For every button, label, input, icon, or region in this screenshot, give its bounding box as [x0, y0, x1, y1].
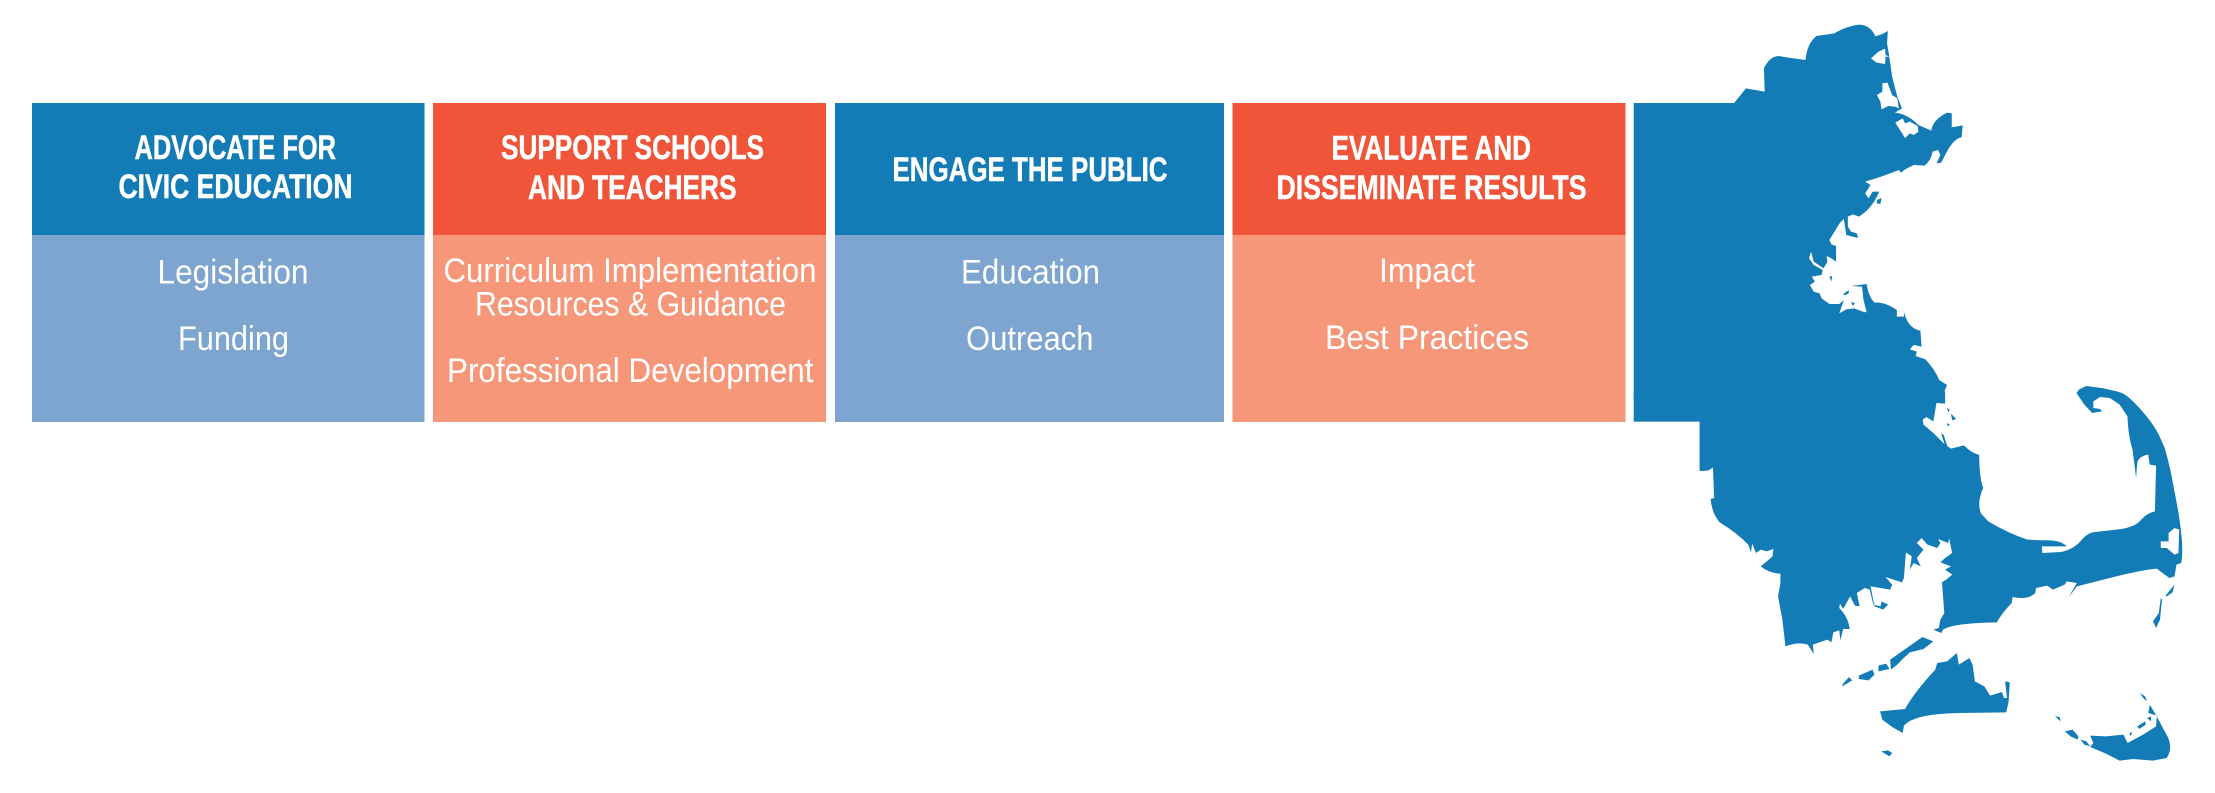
list: education and outreach: [961, 254, 1100, 358]
panel: engage the public: [835, 103, 1224, 422]
list: curriculum and professional development: Professional Development: [447, 352, 814, 390]
list: curriculum and professional development: Resources & Guidance: [475, 286, 786, 324]
list: legislation and funding: Legislation: [158, 254, 308, 292]
heading: advocate for civic education: CIVIC EDUCATION: [118, 168, 352, 206]
list: legislation and funding: Funding: [178, 320, 289, 358]
heading: advocate for civic education: [118, 129, 352, 206]
list: impact and best practices: Best Practices: [1325, 319, 1529, 357]
heading: support schools and teachers: SUPPORT SCHOOLS: [501, 129, 764, 167]
list: impact and best practices: Impact: [1379, 252, 1476, 290]
list: impact and best practices: [1325, 252, 1529, 357]
list: curriculum and professional development: Curriculum Implementation: [444, 252, 816, 290]
panel: evaluate and disseminate results: [1232, 103, 1626, 422]
panel: support schools and teachers: [433, 103, 826, 422]
panel: advocate for civic education: [32, 103, 424, 422]
heading: evaluate and disseminate results: EVALUATE AND: [1332, 130, 1531, 168]
heading: support schools and teachers: [501, 129, 764, 207]
heading: engage the public: ENGAGE THE PUBLIC: [892, 151, 1168, 189]
heading: support schools and teachers: AND TEACHERS: [528, 169, 736, 207]
list: legislation and funding: [158, 254, 308, 358]
heading: evaluate and disseminate results: [1276, 130, 1586, 207]
heading: advocate for civic education: ADVOCATE FOR: [134, 129, 336, 167]
list: education and outreach: Outreach: [966, 320, 1094, 358]
list: education and outreach: Education: [961, 254, 1100, 292]
map: massachusetts silhouette: [1634, 25, 2182, 761]
heading: evaluate and disseminate results: DISSEMINATE RESULTS: [1276, 169, 1586, 207]
list: curriculum and professional development: [444, 252, 816, 390]
